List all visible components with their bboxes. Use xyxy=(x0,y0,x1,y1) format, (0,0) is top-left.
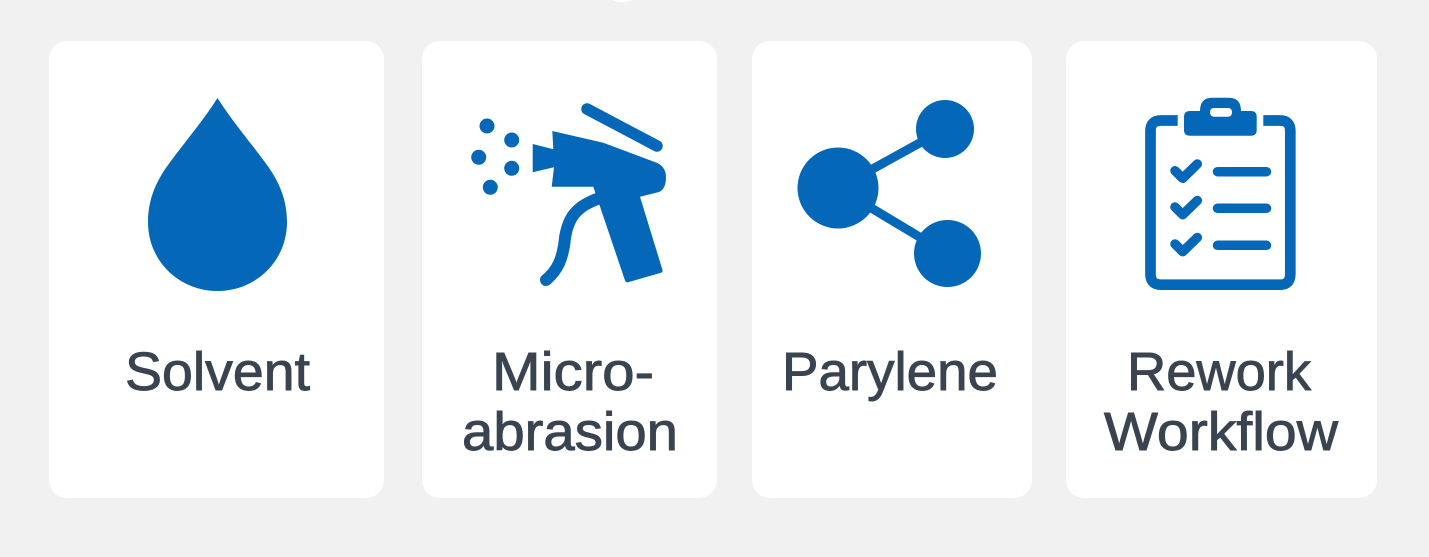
panel: Micro-abrasion xyxy=(422,41,717,498)
icon: water drop xyxy=(148,98,287,291)
heading: Micro-abrasion: Micro- xyxy=(492,342,654,402)
heading: Solvent: Solvent xyxy=(125,342,310,402)
icon: share nodes xyxy=(798,100,981,287)
panel: Solvent xyxy=(49,41,384,498)
panel: Parylene xyxy=(752,41,1032,498)
panel: Rework Workflow: Workflow xyxy=(1104,402,1339,462)
heading: Parylene: Parylene xyxy=(782,342,998,402)
panel: Rework Workflow xyxy=(1066,41,1377,498)
heading: Rework Workflow: Rework xyxy=(1127,342,1312,402)
icon: clipboard checklist xyxy=(1150,98,1290,285)
icon: spray gun xyxy=(471,109,666,282)
panel: Micro-abrasion: abrasion xyxy=(462,402,678,462)
